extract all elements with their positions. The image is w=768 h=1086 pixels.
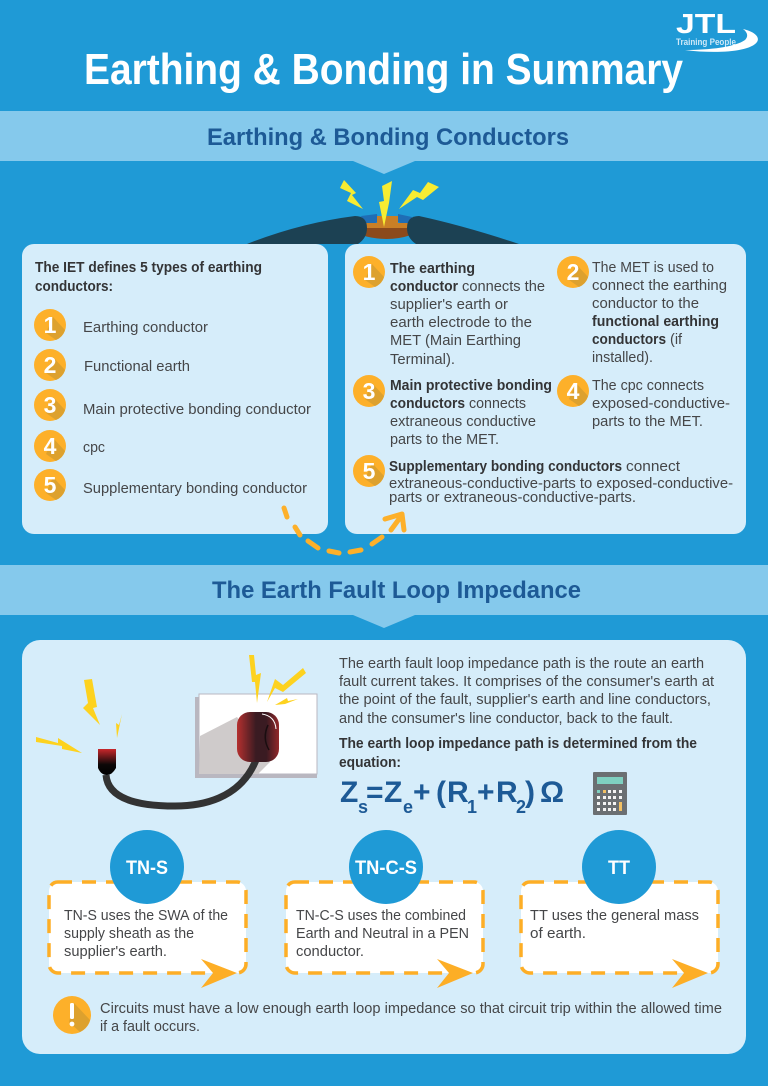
definition 3 <box>353 375 552 448</box>
definition 2: connect the earthing <box>592 278 727 294</box>
logo: JTL Training People: JTL <box>676 8 736 39</box>
intro text <box>35 260 262 295</box>
definition 5: parts or extraneous-conductive-parts. <box>389 490 636 506</box>
equation: ) <box>525 776 535 809</box>
banner: Earthing & Bonding Conductors: Earthing & Bonding Conductors <box>207 124 569 151</box>
intro text: conductors: <box>35 279 113 295</box>
equation: Ω <box>540 776 564 809</box>
definition 2: conductors <box>592 332 666 348</box>
definition 1: Terminal). <box>390 352 455 368</box>
definition 1: 1 <box>363 259 376 285</box>
item 3: 3 <box>44 392 56 418</box>
icon: calculator <box>593 772 627 815</box>
text: impedance path description: The earth fault loop impedance path is the route an earth <box>339 656 704 672</box>
text: impedance path description: The earth loop impedance path is determined from the <box>339 736 697 752</box>
equation <box>340 776 564 817</box>
item 4: 4 <box>44 433 57 459</box>
callout: warning <box>53 996 722 1035</box>
definition 3: 3 <box>363 378 375 404</box>
card: TN-C-S <box>286 830 483 988</box>
definition 2: installed). <box>592 350 653 366</box>
callout: warning: Circuits must have a low enough earth loop impedance so that circuit trip within the allowed time <box>100 1001 722 1017</box>
panel: five types list <box>22 244 328 534</box>
equation: ( <box>436 776 446 809</box>
item 1: Earthing conductor <box>83 320 208 336</box>
item 5: 5 <box>44 472 57 498</box>
card: TT: TT uses the general mass <box>530 908 699 924</box>
definition 5: 5 <box>363 458 376 484</box>
card: TT <box>521 830 718 988</box>
definition 5: connect <box>626 459 680 475</box>
definition 3: conductors <box>390 396 465 412</box>
definition 4: 4 <box>567 378 580 404</box>
text: impedance path description: the point of the fault, supplier's earth and line conductors, <box>339 692 711 708</box>
definition 3: connects <box>469 396 526 412</box>
definition 4: parts to the MET. <box>592 414 703 430</box>
definition 2: functional earthing <box>592 314 719 330</box>
item 2: Functional earth <box>84 359 190 375</box>
item 2 <box>34 349 190 381</box>
equation: 1 <box>467 797 477 817</box>
definition 4: exposed-conductive- <box>592 396 730 412</box>
equation: e <box>403 797 413 817</box>
callout: warning: if a fault occurs. <box>100 1019 200 1035</box>
equation: R <box>447 776 469 809</box>
card: TN-S: supply sheath as the <box>64 926 194 942</box>
item 1 <box>34 309 208 341</box>
equation: Z <box>384 776 402 809</box>
definition 1: MET (Main Earthing <box>390 333 521 349</box>
item 5 <box>34 469 307 501</box>
definition 2 <box>557 256 727 366</box>
definition 3: extraneous conductive <box>390 414 536 430</box>
text: impedance path description <box>339 656 714 771</box>
card: TN-S: supplier's earth. <box>64 944 167 960</box>
logo: JTL Training People: Training People <box>676 37 736 48</box>
definition 2: (if <box>670 332 683 348</box>
panel: earth fault loop impedance <box>22 640 746 1054</box>
intro text: The IET defines 5 types of earthing <box>35 260 262 276</box>
panel: conductor definitions <box>345 244 746 534</box>
definition 1: conductor <box>390 279 458 295</box>
definition 2: conductor to the <box>592 296 699 312</box>
definition 3: parts to the MET. <box>390 432 499 448</box>
item 1: 1 <box>44 312 57 338</box>
definition 5 <box>353 455 733 506</box>
card: TN-C-S: Earth and Neutral in a PEN <box>296 926 469 942</box>
equation: + <box>413 776 431 809</box>
banner: The Earth Fault Loop Impedance <box>0 565 768 628</box>
text: impedance path description: equation: <box>339 755 401 771</box>
definition 2: 2 <box>567 259 579 285</box>
card: TN-C-S: TN-C-S <box>355 858 417 879</box>
item 4 <box>34 430 105 462</box>
definition 1: The earthing <box>390 261 475 277</box>
banner: The Earth Fault Loop Impedance: The Earth Fault Loop Impedance <box>212 577 581 604</box>
item 4: cpc <box>83 440 105 456</box>
text: impedance path description: and the consumer's line conductor, back to the fault. <box>339 711 673 727</box>
arrow: dashed curve between panels <box>284 508 404 553</box>
item 3 <box>34 389 311 421</box>
definition 5: Supplementary bonding conductors <box>389 459 622 475</box>
definition 3: Main protective bonding <box>390 378 552 394</box>
definition 1: connects the <box>462 279 545 295</box>
definition 4 <box>557 375 730 430</box>
card: TN-S: TN-S <box>126 858 168 879</box>
card: TN-C-S: conductor. <box>296 944 364 960</box>
definition 1: supplier's earth or <box>390 297 508 313</box>
equation: = <box>366 776 384 809</box>
banner: Earthing & Bonding Conductors <box>0 111 768 174</box>
definition 1 <box>353 256 545 368</box>
card: TN-S <box>49 830 246 988</box>
definition 2: The MET is used to <box>592 260 714 276</box>
definition 1: earth electrode to the <box>390 315 532 331</box>
icon: socket with plug and sparks <box>36 655 317 806</box>
icon: damaged cable with sparks <box>247 180 519 244</box>
text: impedance path description: fault current takes. It comprises of the consumer's earth at <box>339 674 714 690</box>
item 5: Supplementary bonding conductor <box>83 481 307 497</box>
card: TN-C-S: TN-C-S uses the combined <box>296 908 466 924</box>
card: TN-S: TN-S uses the SWA of the <box>64 908 228 924</box>
equation: Z <box>340 776 358 809</box>
logo: JTL Training People <box>676 8 758 52</box>
item 3: Main protective bonding conductor <box>83 402 311 418</box>
definition 4: The cpc connects <box>592 378 704 394</box>
equation: + <box>477 776 495 809</box>
title: Earthing & Bonding in Summary <box>84 45 683 94</box>
equation: s <box>358 797 368 817</box>
item 2: 2 <box>44 352 56 378</box>
definition 5: extraneous-conductive-parts to exposed-conductive- <box>389 476 733 492</box>
equation: 2 <box>516 797 526 817</box>
card: TT: of earth. <box>530 926 586 942</box>
equation: R <box>496 776 518 809</box>
card: TT: TT <box>608 858 630 879</box>
